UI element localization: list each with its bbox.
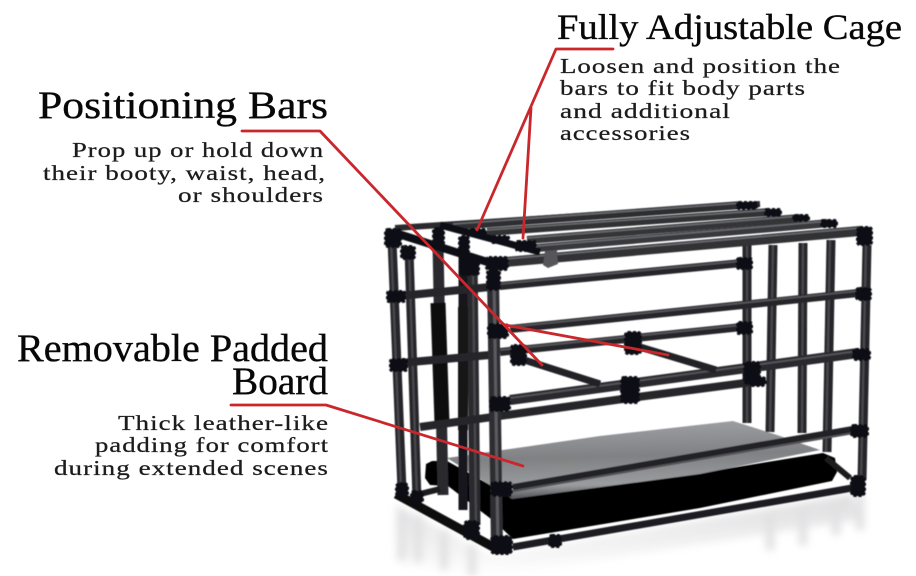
description (560, 54, 841, 145)
description: Loosen and position the (560, 54, 841, 78)
leader line (231, 405, 523, 466)
description: bars to fit body parts (560, 76, 806, 100)
clamps and connectors (385, 202, 872, 554)
heading: Positioning Bars (38, 84, 328, 127)
description: Prop up or hold down (72, 138, 324, 162)
description: their booty, waist, head, (43, 161, 326, 185)
padded board (425, 421, 837, 539)
board top face (447, 421, 820, 499)
floor reflection (396, 494, 860, 576)
description: Thick leather-like (118, 411, 329, 435)
description: and additional (560, 99, 731, 123)
callout: removable padded board (17, 327, 523, 480)
callout: fully adjustable cage (477, 7, 902, 238)
front right upright (493, 275, 498, 550)
horizontal rails (396, 261, 858, 548)
heading: Fully Adjustable Cage (557, 7, 902, 47)
heading: Board (232, 360, 329, 403)
description: or shoulders (178, 183, 324, 207)
description: padding for comfort (95, 433, 329, 457)
heading (17, 327, 329, 403)
leader lines (242, 131, 668, 365)
board front and side (425, 453, 837, 539)
product: cage with padded board (385, 202, 872, 554)
top bar sleeve (543, 250, 558, 268)
positioning bars (518, 347, 716, 384)
leader lines (477, 49, 613, 238)
description: accessories (560, 121, 691, 145)
top bars (392, 203, 860, 265)
description (54, 411, 329, 480)
description (43, 138, 326, 207)
description: during extended scenes (54, 456, 329, 480)
back and side vertical bars (391, 240, 867, 525)
callout: positioning bars (38, 84, 668, 365)
heading: Removable Padded (17, 327, 329, 370)
